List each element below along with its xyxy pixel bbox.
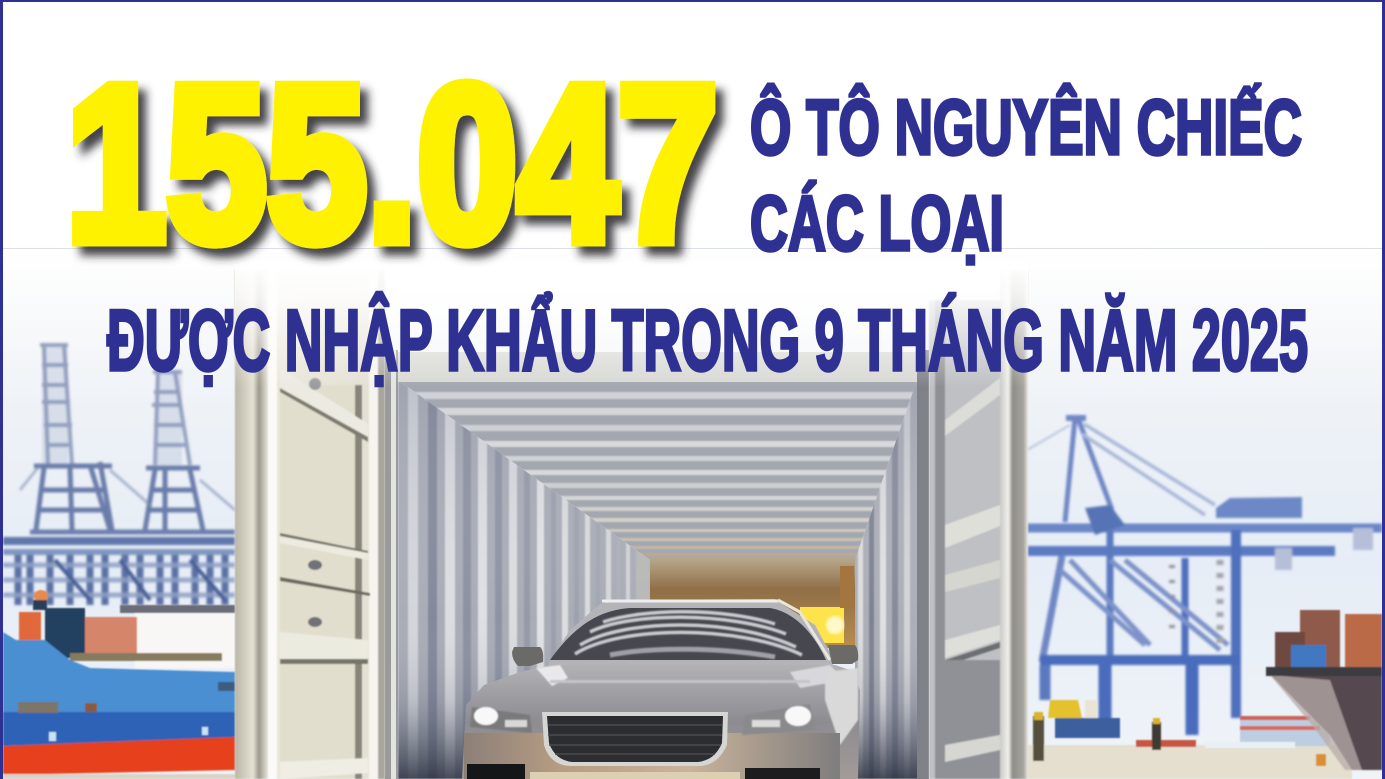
car left headlight xyxy=(470,707,532,733)
hood highlights xyxy=(536,665,858,745)
right container door xyxy=(929,270,1028,779)
car grille xyxy=(542,712,728,766)
car xyxy=(462,599,860,779)
car fog lamp recesses xyxy=(467,764,820,779)
right gantry crane xyxy=(1027,418,1382,735)
car mirrors xyxy=(512,645,858,666)
inner frame posts xyxy=(385,350,929,779)
left cargo ship xyxy=(3,590,235,779)
right port scene: crane and container ship xyxy=(1027,418,1382,779)
fade of container top into background xyxy=(235,262,1028,387)
headline number: 155.047 xyxy=(66,40,718,288)
left container door xyxy=(235,270,385,779)
shipping container xyxy=(235,262,1028,779)
car roof and windshield xyxy=(548,599,835,668)
container right corrugated wall xyxy=(853,378,919,779)
container back wall with light xyxy=(650,558,856,648)
left port scene: cranes and ship xyxy=(3,345,235,779)
container left corrugated wall xyxy=(398,378,653,779)
left gantry cranes xyxy=(3,345,235,605)
car hood and fenders xyxy=(462,665,860,779)
container interior ceiling xyxy=(395,378,925,563)
subtitle line 2: CÁC LOẠI xyxy=(750,179,1004,267)
car lower bumper xyxy=(464,733,840,779)
right ship and containers xyxy=(1027,610,1382,779)
car right headlight xyxy=(742,704,816,735)
container top frame xyxy=(388,352,918,382)
